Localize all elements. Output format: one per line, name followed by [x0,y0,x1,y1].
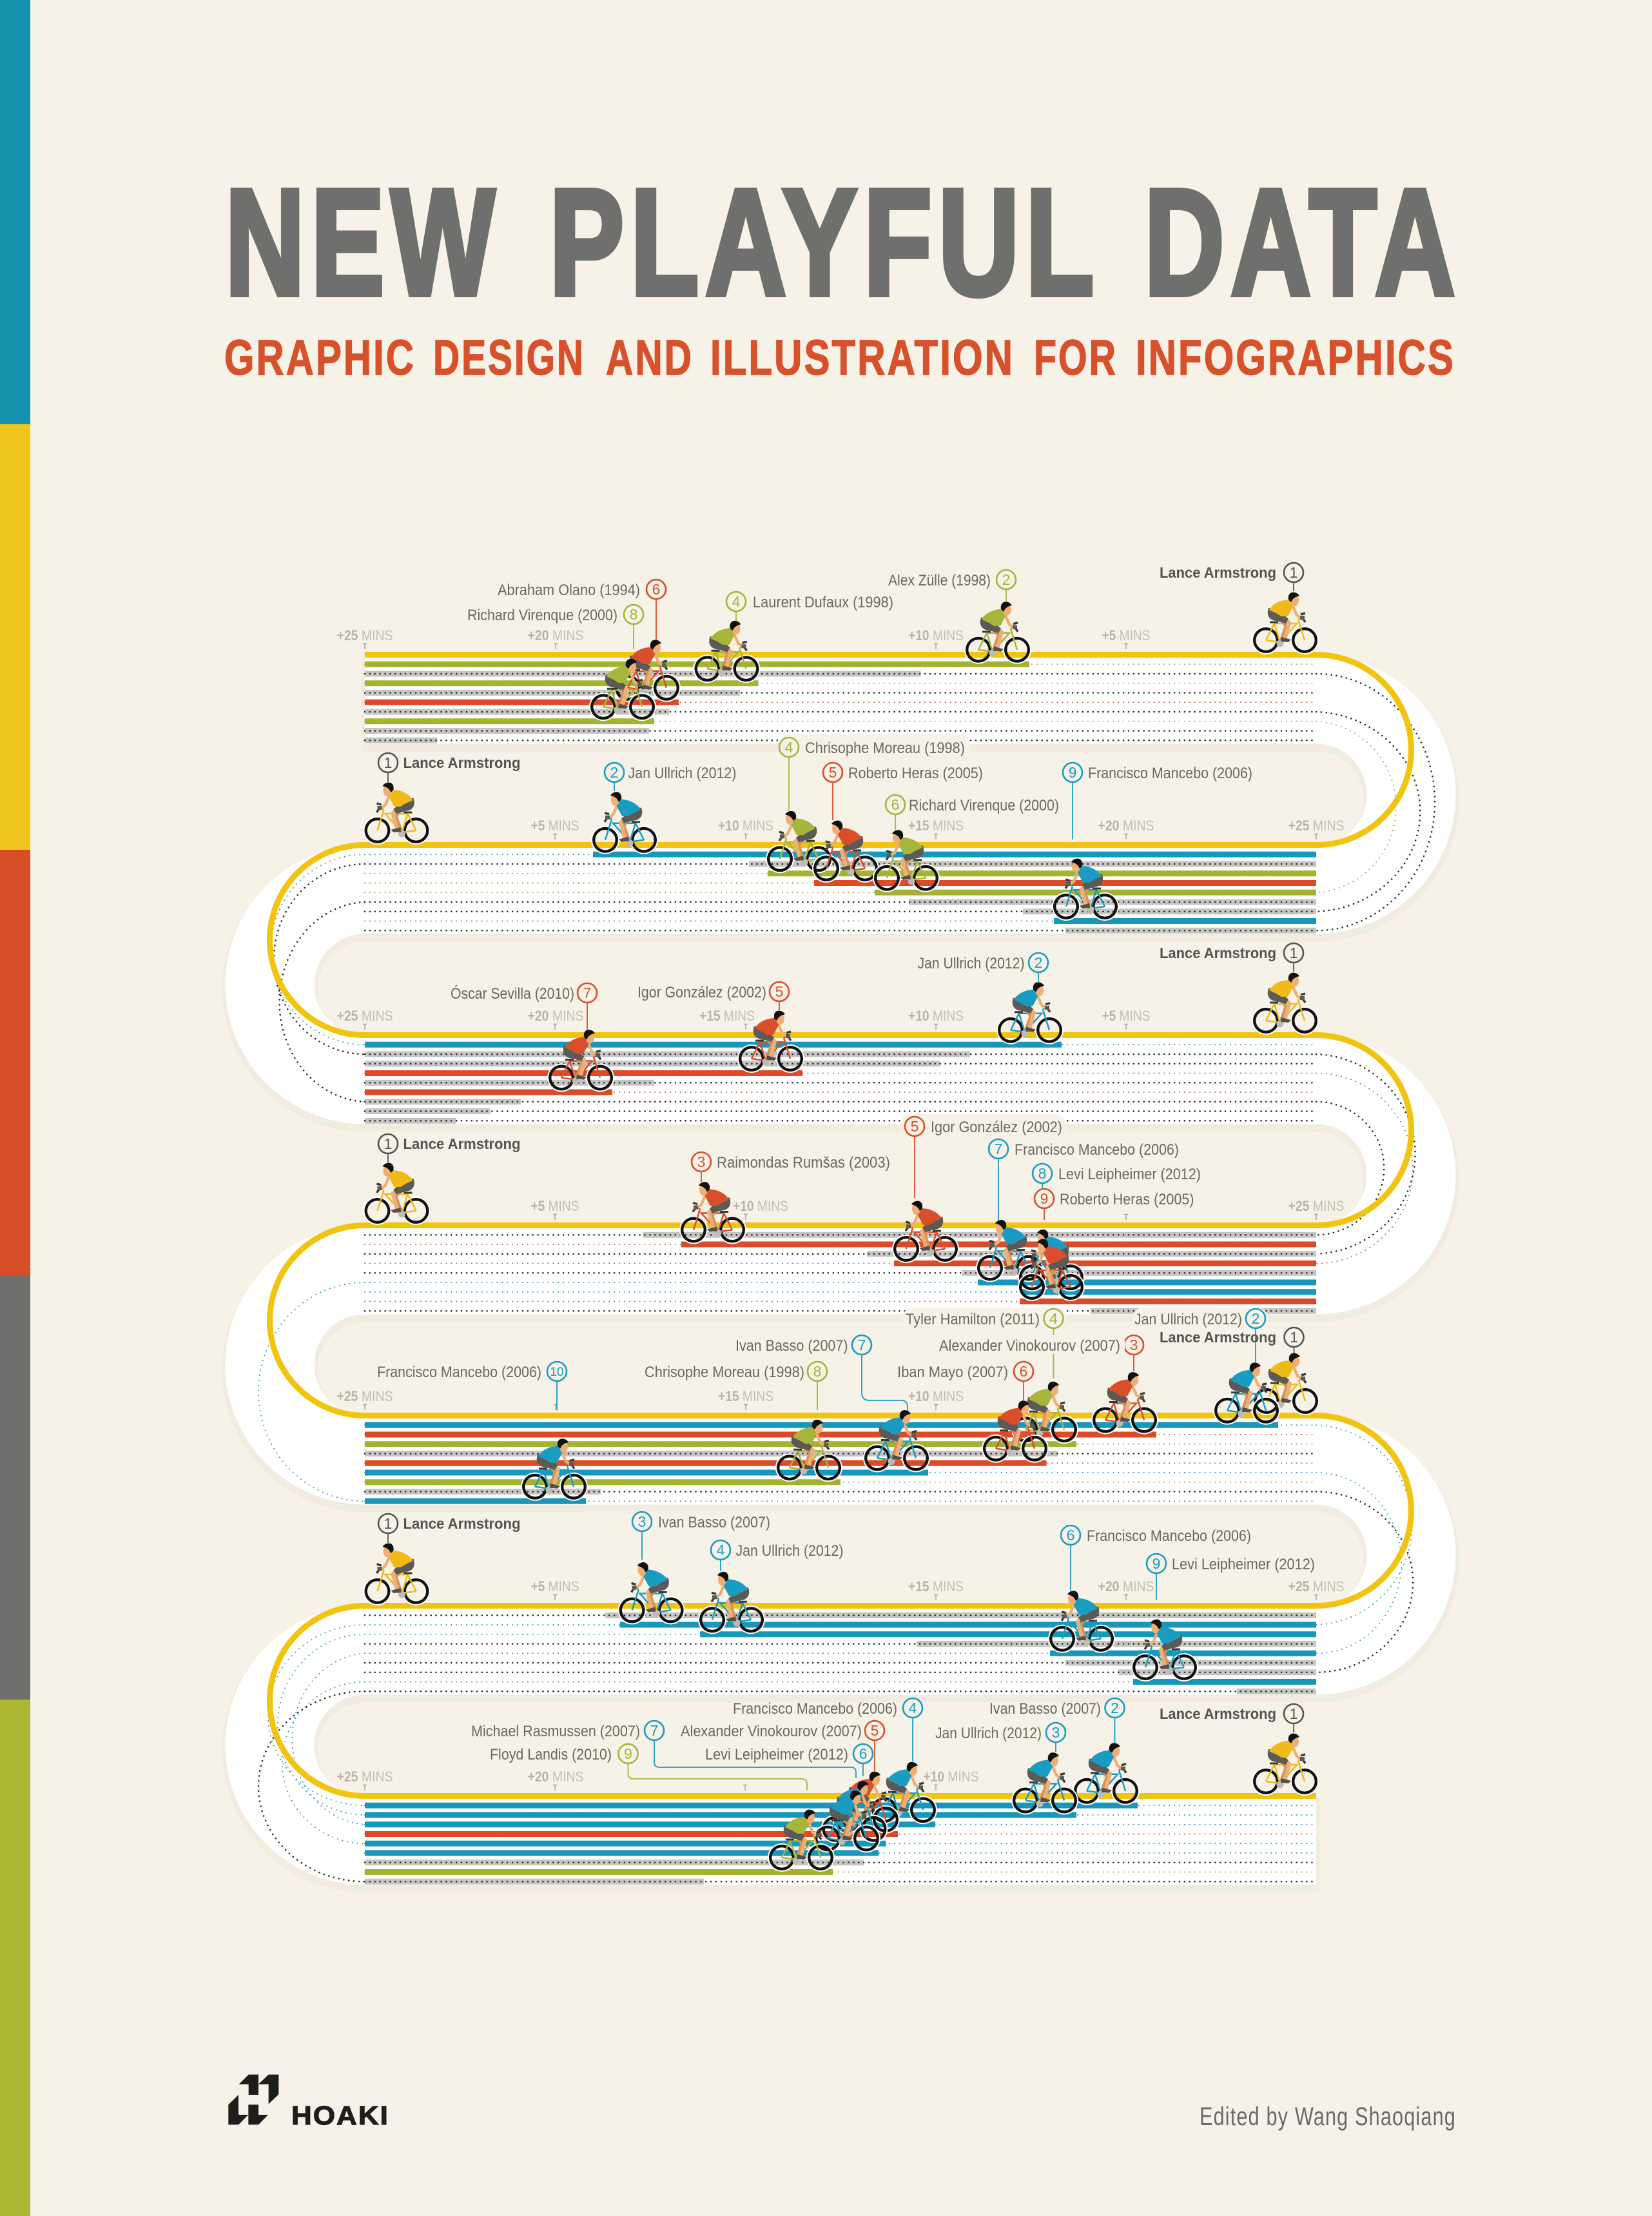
rider: Lance Armstrong [365,783,428,843]
rider: Roberto Heras [814,821,877,881]
label: Lance Armstrong: Lance Armstrong [403,1135,521,1152]
time bars: row 6 [365,1615,1316,1691]
rider: Ivan Basso [620,1562,683,1622]
label: Jan Ullrich: Jan Ullrich (2012) [918,955,1025,972]
row 2 labels [378,738,1252,839]
time markers: +25 MINS [1288,818,1345,834]
label: Lance Armstrong: 1 [1290,1705,1297,1722]
rider: Francisco Mancebo [1054,859,1117,919]
rider: Jan Ullrich [593,792,656,852]
label: Lance Armstrong: 1 [384,754,392,771]
label: Jan Ullrich: 2 [1252,1310,1259,1327]
label: Igor González [637,982,789,1010]
label: Francisco Mancebo: Francisco Mancebo (2006) [1087,1527,1251,1545]
rider: Francisco Mancebo [1050,1591,1113,1651]
label: Richard Virenque: Richard Virenque (2000) [909,797,1059,814]
time markers: +15 MINS [699,1008,755,1024]
label: Alexander Vinokourov: Alexander Vinokourov (2007) [939,1337,1120,1355]
time markers: +25 MINS [1288,1198,1345,1214]
time markers: +25 MINS [336,1008,393,1024]
label: Francisco Mancebo: 6 [1067,1527,1074,1544]
rider: Lance Armstrong [1254,1734,1317,1794]
label: Levi Leipheimer: 9 [1152,1555,1160,1572]
time bars: row 7 [365,1805,1316,1881]
label: Raimondas Rumšas [692,1152,890,1182]
label: Iban Mayo: Iban Mayo (2007) [897,1364,1008,1381]
time bars: row 3 [365,1044,1316,1121]
rider: Tyler Hamilton [1013,1382,1076,1442]
label: Francisco Mancebo: 9 [1069,764,1076,781]
time markers: +25 MINS [336,1769,393,1785]
time markers: +10 MINS [718,818,773,834]
label: Ivan Basso [989,1698,1124,1743]
label: Alexander Vinokourov [935,1335,1143,1371]
time bars: row 2 [365,854,1316,930]
label: Floyd Landis: 9 [624,1745,632,1762]
rider: Jan Ullrich [1215,1362,1278,1423]
title [226,157,1462,326]
time markers: +20 MINS [527,1769,584,1785]
label: Levi Leipheimer [1147,1554,1315,1600]
subtitle: FOR [1034,330,1118,386]
rider: Francisco Mancebo [978,1220,1041,1280]
label: Abraham Olano [498,580,666,640]
time markers: +10 MINS [908,1388,964,1404]
label: Iban Mayo: 6 [1020,1363,1027,1380]
subtitle: GRAPHIC [224,330,416,386]
rider: Jan Ullrich [998,982,1062,1043]
label: Jan Ullrich [935,1723,1065,1752]
label: Jan Ullrich: 3 [1052,1724,1060,1741]
label: Jan Ullrich: Jan Ullrich (2012) [736,1542,843,1560]
label: Francisco Mancebo: Francisco Mancebo (2006) [1088,765,1252,782]
label: Richard Virenque [886,795,1059,830]
editor credit: Edited by Wang Shaoqiang [1200,2103,1456,2131]
label: Lance Armstrong: Lance Armstrong [1160,945,1276,961]
time markers: +20 MINS [1098,1578,1154,1594]
rider: Richard Virenque [875,830,938,890]
label: Francisco Mancebo [989,1139,1179,1221]
time markers: +10 MINS [733,1198,788,1214]
label: Lance Armstrong: 1 [384,1135,392,1152]
label: Jan Ullrich [1134,1309,1265,1362]
yellow leader track [269,655,1412,1796]
label: Richard Virenque [467,605,643,649]
label: Lance Armstrong [378,753,521,782]
label: Levi Leipheimer: Levi Leipheimer (2012) [1058,1166,1201,1183]
label: Alex Zülle [888,570,1016,602]
label: Jan Ullrich: 2 [1035,954,1042,971]
label: Laurent Dufaux [726,592,893,623]
label: Lance Armstrong: Lance Armstrong [403,1515,521,1532]
dotted curves in the turns [258,674,1435,1881]
label: Lance Armstrong: Lance Armstrong [1160,1329,1276,1346]
label: Raimondas Rumšas: 3 [697,1153,705,1170]
row 4 labels [378,1117,1201,1221]
rider: Chrisophe Moreau [777,1420,841,1480]
label: Jan Ullrich [711,1540,843,1571]
rider: Raimondas Rumšas [681,1182,744,1242]
label: Laurent Dufaux: 4 [732,593,741,610]
row 3 riders [549,973,1317,1090]
label: Roberto Heras [1035,1189,1194,1220]
subtitle [224,330,1455,386]
time markers: +25 MINS [336,627,393,643]
label: Lance Armstrong: 1 [1290,945,1297,961]
label: Ivan Basso: Ivan Basso (2007) [658,1514,770,1531]
row 5 labels [377,1309,1303,1412]
label: Jan Ullrich [605,763,736,791]
label: Igor González [905,1117,1062,1198]
label: Levi Leipheimer [1033,1164,1201,1189]
rider: Levi Leipheimer [822,1781,886,1841]
label: Francisco Mancebo [1061,1525,1251,1591]
time markers: +20 MINS [1098,818,1154,834]
rider: Alex Zülle [966,602,1029,662]
rider: Óscar Sevilla [549,1030,612,1090]
label: Jan Ullrich [918,953,1048,982]
rider: Ivan Basso [1074,1743,1138,1803]
colour stripes [0,0,30,2216]
icon: Hoaki logo [228,2075,278,2124]
rider: Jan Ullrich [700,1572,763,1632]
label: Lance Armstrong: Lance Armstrong [1160,564,1276,581]
subtitle: DESIGN [433,330,585,386]
label: Abraham Olano: Abraham Olano (1994) [498,582,640,599]
label: Raimondas Rumšas: Raimondas Rumšas (2003) [717,1154,890,1172]
label: Chrisophe Moreau: Chrisophe Moreau (1998) [805,740,965,757]
label: Lance Armstrong: Lance Armstrong [403,754,521,771]
row 2 riders [365,783,1117,919]
label: Alexander Vinokourov [681,1721,884,1771]
rider: Lance Armstrong [365,1544,428,1603]
rider: Lance Armstrong [1254,593,1317,652]
label: Ivan Basso [632,1512,770,1560]
label: Tyler Hamilton: 4 [1049,1310,1058,1327]
label: Floyd Landis: Floyd Landis (2010) [490,1746,612,1763]
label: Laurent Dufaux: Laurent Dufaux (1998) [753,594,893,611]
label: Roberto Heras [823,763,983,820]
rider: Ivan Basso [865,1410,928,1470]
rider: Michael Rasmussen [815,1790,879,1850]
row 3 labels [451,943,1303,1030]
label: Chrisophe Moreau: 8 [813,1363,821,1380]
label: Lance Armstrong: 1 [1290,1329,1298,1346]
row 6 riders [365,1544,1196,1680]
label: Levi Leipheimer: Levi Leipheimer (2012) [1172,1556,1315,1573]
label: Francisco Mancebo: 10 [550,1366,564,1379]
label: Roberto Heras: Roberto Heras (2005) [1060,1191,1194,1208]
label: Ivan Basso: 3 [638,1513,646,1530]
time markers: +5 MINS [531,818,579,834]
label: Chrisophe Moreau: Chrisophe Moreau (1998) [645,1364,804,1381]
label: Tyler Hamilton [906,1309,1064,1378]
time markers: +5 MINS [531,1198,579,1214]
title: NEW [226,157,501,326]
rider: Iban Mayo [984,1400,1047,1461]
label: Chrisophe Moreau [779,738,965,810]
label: Igor González: 5 [775,983,783,1000]
label: Francisco Mancebo: Francisco Mancebo (2006) [377,1364,541,1381]
label: Jan Ullrich: Jan Ullrich (2012) [935,1725,1042,1742]
rider: Jan Ullrich [1013,1752,1076,1813]
time markers: +10 MINS [908,627,964,643]
label: Floyd Landis [490,1744,807,1790]
row 6 labels [378,1512,1315,1600]
rider: Levi Leipheimer [1133,1620,1196,1680]
time markers: +25 MINS [1288,1578,1345,1594]
label: Iban Mayo [897,1362,1033,1400]
label: Igor González: Igor González (2002) [637,984,766,1001]
label: Alexander Vinokourov: 3 [1130,1337,1138,1353]
label: Jan Ullrich: Jan Ullrich (2012) [1134,1311,1242,1328]
time bars: row 5 [365,1425,1316,1501]
label: Michael Rasmussen [471,1721,856,1778]
label: Tyler Hamilton: Tyler Hamilton (2011) [906,1311,1040,1328]
label: Óscar Sevilla: 7 [583,985,591,1001]
time bars: row 4 [365,1235,1316,1311]
row 7 labels [471,1698,1303,1790]
rider: Igor González [894,1201,957,1261]
rider: Floyd Landis [770,1810,833,1870]
label: Jan Ullrich: 2 [610,764,618,781]
label: Lance Armstrong [1160,1328,1303,1355]
label: Lance Armstrong [378,1134,521,1162]
label: Francisco Mancebo [1063,763,1252,839]
rider: Lance Armstrong [1254,973,1317,1033]
label: Levi Leipheimer: Levi Leipheimer (2012) [705,1746,848,1763]
row 1 labels [467,563,1303,649]
rider: Abraham Olano [616,640,679,700]
label: Roberto Heras: 9 [1040,1190,1048,1207]
label: Igor González: 5 [911,1118,918,1135]
label: Chrisophe Moreau: 4 [785,739,793,756]
subtitle: AND [606,330,694,386]
time markers: +20 MINS [527,627,584,643]
rider: Igor González [739,1011,802,1071]
time markers: +10 MINS [923,1769,978,1785]
row 7 riders [770,1734,1317,1870]
rider: Lance Armstrong [1254,1353,1317,1413]
label: Ivan Basso: 7 [858,1337,866,1353]
label: Alexander Vinokourov: Alexander Vinokourov (2007) [681,1723,862,1740]
label: Lance Armstrong [1160,943,1303,972]
rider: Alexander Vinokourov [835,1772,898,1832]
time markers: +5 MINS [1102,1008,1150,1024]
label: Richard Virenque: 6 [891,796,899,813]
subtitle: INFOGRAPHICS [1136,330,1455,386]
publisher name: HOAKI [291,2101,389,2130]
time markers [336,627,1345,1790]
rider: Chrisophe Moreau [768,811,831,871]
label: Ivan Basso: Ivan Basso (2007) [735,1337,848,1355]
label: Chrisophe Moreau [645,1362,827,1410]
track shadow [225,659,1455,1889]
label: Levi Leipheimer [705,1744,873,1776]
time markers: +5 MINS [1102,627,1150,643]
row 4 riders [365,1163,1083,1299]
label: Levi Leipheimer: 8 [1038,1165,1046,1182]
title: PLAYFUL [549,157,1101,326]
time bars: row 1 [365,664,1316,740]
time markers: +15 MINS [718,1388,773,1404]
rider: Levi Leipheimer [1020,1230,1083,1289]
row 1 riders [591,593,1317,719]
label: Michael Rasmussen: Michael Rasmussen (2007) [471,1723,640,1740]
label: Francisco Mancebo [733,1698,922,1761]
label: Lance Armstrong: Lance Armstrong [1160,1705,1276,1722]
label: Francisco Mancebo [377,1362,567,1410]
label: Jan Ullrich: 4 [717,1542,725,1558]
rider: Lance Armstrong [365,1163,428,1223]
label: Michael Rasmussen: 7 [650,1722,658,1739]
rider: Alexander Vinokourov [1093,1372,1156,1433]
rider: Roberto Heras [1020,1239,1083,1299]
label: Levi Leipheimer: 6 [859,1745,867,1762]
row 5 riders [523,1353,1317,1499]
rider: Richard Virenque [591,659,654,719]
label: Lance Armstrong: 1 [384,1515,392,1532]
label: Richard Virenque: 8 [630,606,637,623]
label: Abraham Olano: 6 [652,581,660,598]
label: Richard Virenque: Richard Virenque (2000) [467,607,617,624]
label: Lance Armstrong [1160,1704,1303,1732]
rider: Francisco Mancebo [872,1762,935,1822]
time markers: +5 MINS [531,1578,579,1594]
label: Roberto Heras: Roberto Heras (2005) [848,765,983,782]
subtitle: ILLUSTRATION [710,330,1015,386]
time markers: +15 MINS [908,1578,964,1594]
label background patches [779,734,1268,1340]
label: Óscar Sevilla [451,983,597,1030]
time markers: +15 MINS [908,818,964,834]
label: Francisco Mancebo: Francisco Mancebo (2006) [1015,1141,1179,1159]
time markers: +10 MINS [908,1008,964,1024]
label: Alex Zülle: Alex Zülle (1998) [888,572,991,589]
label: Ivan Basso [735,1335,908,1412]
label: Francisco Mancebo: 4 [909,1700,917,1716]
title: DATA [1145,157,1462,326]
label: Igor González: Igor González (2002) [931,1119,1062,1136]
label: Lance Armstrong [1160,563,1303,591]
label: Lance Armstrong: 1 [1290,564,1297,581]
label: Óscar Sevilla: Óscar Sevilla (2010) [451,985,574,1003]
time markers: +25 MINS [336,1388,393,1404]
label: Francisco Mancebo: Francisco Mancebo (2006) [733,1700,897,1718]
rider: Laurent Dufaux [695,621,758,681]
label: Ivan Basso: 2 [1111,1700,1119,1716]
label: Alexander Vinokourov: 5 [871,1722,879,1739]
label: Lance Armstrong [378,1514,521,1543]
label: Ivan Basso: Ivan Basso (2007) [989,1700,1101,1718]
time markers: +20 MINS [527,1008,584,1024]
label: Roberto Heras: 5 [829,764,837,781]
label: Alex Zülle: 2 [1002,571,1010,588]
white track ribbon [225,655,1455,1885]
label: Jan Ullrich: Jan Ullrich (2012) [628,765,736,782]
rider: Francisco Mancebo [523,1438,586,1499]
label: Francisco Mancebo: 7 [995,1141,1002,1157]
